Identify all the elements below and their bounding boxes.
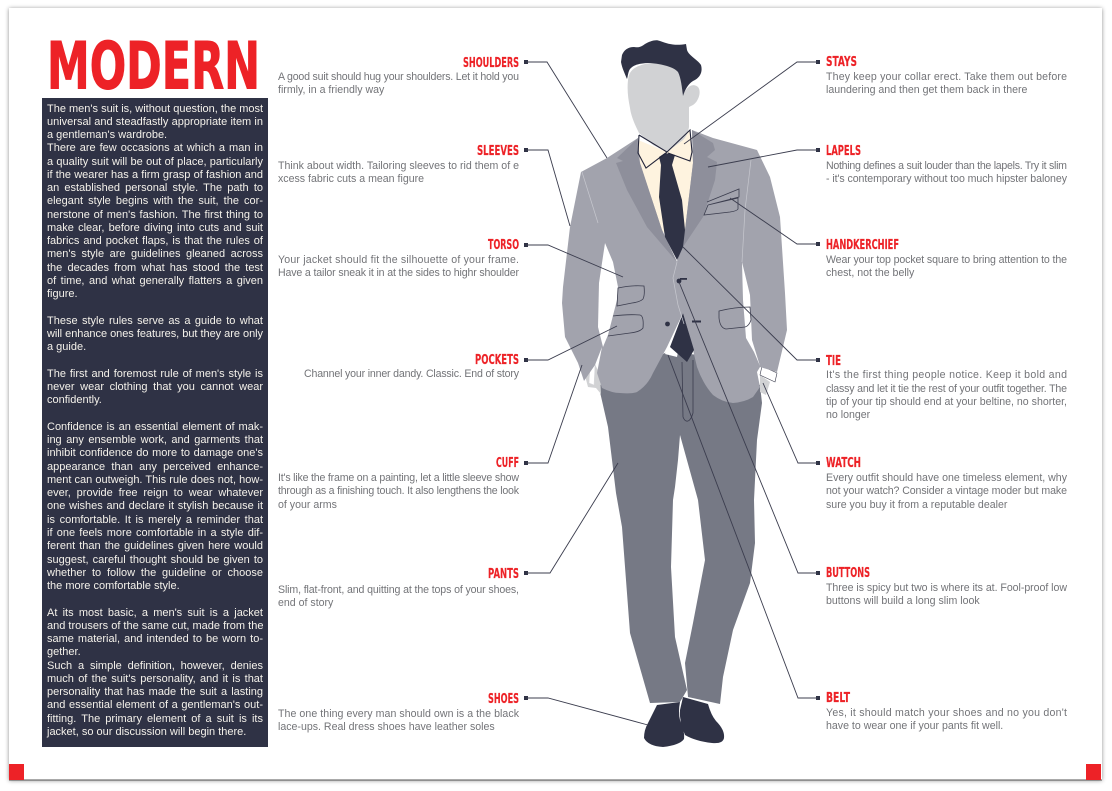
leader: buttons bbox=[679, 282, 820, 575]
necktie bbox=[659, 153, 685, 260]
leader: sleeves bbox=[524, 148, 570, 226]
shirt bbox=[638, 130, 693, 235]
callout: lapels: Nothing defines a suit louder than the lapels. Try it slim bbox=[826, 160, 1067, 172]
panel: introduction text: figure. bbox=[47, 288, 78, 300]
panel: introduction text: Such a simple definition, however, denies bbox=[47, 660, 263, 672]
head and ear bbox=[628, 63, 700, 152]
panel: introduction text: ment can outweigh. This rule does not, how- bbox=[47, 474, 263, 486]
callout: buttons: Three is spicy but two is where its at. Fool-proof low bbox=[826, 582, 1067, 594]
lower tie bbox=[670, 313, 694, 362]
buttons bbox=[665, 278, 701, 326]
pocket square bbox=[704, 189, 739, 215]
panel: introduction text: There are few occasions at which a man in bbox=[47, 142, 263, 154]
hair bbox=[621, 40, 702, 96]
jacket front seam bbox=[582, 160, 751, 324]
panel: introduction text: an established personal style. The path to bbox=[47, 182, 263, 194]
callout: pants: PANTS bbox=[488, 567, 519, 582]
leader: shoes bbox=[524, 696, 648, 725]
panel: introduction text: is comfortable. It is merely a reminder that bbox=[47, 514, 263, 526]
callout: cuff: of your arms bbox=[278, 499, 337, 511]
callout: handkerchief bbox=[826, 238, 1067, 279]
panel: introduction text: These style rules serve as a guide to what bbox=[47, 315, 263, 327]
leader: lapels bbox=[708, 148, 820, 167]
panel: introduction text: At its most basic, a men's suit is a jacket bbox=[47, 607, 263, 619]
leader: handkerchief bbox=[730, 198, 820, 246]
corner marker: bottom left bbox=[9, 764, 24, 780]
cuffs bbox=[589, 365, 595, 385]
callout: torso: TORSO bbox=[488, 238, 519, 253]
callout: lapels: LAPELS bbox=[826, 144, 861, 159]
shoes bbox=[644, 697, 724, 747]
panel: introduction text: whether to follow the guideline or choose bbox=[47, 567, 263, 579]
panel: introduction text: Confidence is an essential element of mak- bbox=[47, 421, 263, 433]
callout: tie: It's the first thing people notice. Keep it bold and bbox=[826, 369, 1067, 381]
callout: watch: not your watch? Consider a vintage moder but make bbox=[826, 485, 1067, 497]
callout: shoulders: SHOULDERS bbox=[463, 56, 519, 71]
panel: introduction text: confidently. bbox=[47, 394, 102, 406]
leader: stays bbox=[684, 60, 820, 144]
right lapel bbox=[677, 130, 717, 262]
callout: shoes bbox=[278, 692, 520, 733]
callout: shoulders bbox=[278, 56, 519, 96]
callout: pockets: POCKETS bbox=[475, 353, 519, 368]
panel: introduction text: the decades from what has stood the test bbox=[47, 262, 263, 274]
panel: introduction text: and trousers of the same cut, made from the bbox=[47, 620, 263, 632]
panel: introduction text: ever, provide free reign to wear whatever bbox=[47, 487, 263, 499]
leader: pockets bbox=[524, 326, 617, 362]
callout: tie: no longer bbox=[826, 409, 871, 421]
belly shirt gap bbox=[665, 349, 678, 357]
callout: watch: Every outfit should have one timeless element, why bbox=[826, 472, 1068, 484]
panel: introduction text: personality that has made the suit a lasting bbox=[47, 686, 263, 698]
panel: introduction text: inhibit confidence do more to damage one's bbox=[47, 447, 263, 459]
callout: tie: tip of your tip should end at your beltine, no shorter, bbox=[826, 396, 1067, 408]
leader: cuff bbox=[524, 365, 582, 465]
callout: watch bbox=[826, 456, 1068, 511]
callout: belt bbox=[826, 691, 1067, 732]
callout: belt: Yes, it should match your shoes and no you don't bbox=[826, 707, 1067, 719]
callout: buttons: buttons will build a long slim look bbox=[826, 595, 980, 607]
callout: torso bbox=[278, 238, 519, 279]
panel: introduction text: gether. bbox=[47, 646, 81, 658]
panel: introduction text: one wishes and declare it stylish because it bbox=[47, 500, 263, 512]
gap between left sleeve and torso bbox=[598, 243, 618, 347]
leader: pants bbox=[524, 463, 618, 575]
callout: handkerchief: chest, not the belly bbox=[826, 267, 915, 279]
callout: stays: They keep your collar erect. Take them out before bbox=[826, 71, 1067, 83]
hands bbox=[584, 364, 770, 395]
callout: cuff: through as a finishing touch. It also lengthens the look bbox=[278, 485, 520, 497]
callout: handkerchief: HANDKERCHIEF bbox=[826, 238, 899, 253]
panel: introduction text: same material, and intended to be worn to- bbox=[47, 633, 263, 645]
panel: introduction text: the more comfortable style. bbox=[47, 580, 180, 592]
panel: introduction text: a quality suit will be out of place, particularly bbox=[47, 156, 263, 168]
panel: introduction text: never wear clothing that you cannot wear bbox=[47, 381, 263, 393]
leader: watch bbox=[763, 383, 820, 465]
callout: torso: Your jacket should fit the silhouette of your frame. bbox=[278, 254, 519, 266]
panel: introduction text: The first and foremost rule of men's style is bbox=[47, 368, 263, 380]
callout: pants: Slim, flat-front, and quitting at the tops of your shoes, bbox=[278, 584, 519, 596]
panel: introduction text: ferent than the guidelines given here would bbox=[47, 540, 263, 552]
callout: tie: classy and let it tie the rest of your outfit together. The bbox=[826, 383, 1067, 395]
leader: shoulders bbox=[524, 60, 607, 158]
panel: introduction text: The men's suit is, without question, the most bbox=[47, 102, 263, 114]
jacket pockets and seams bbox=[608, 286, 751, 421]
panel: introduction text: and essential element of a gentleman's out- bbox=[47, 699, 263, 711]
panel: introduction text: appearance than any perceived enhance- bbox=[47, 461, 263, 473]
leader: tie bbox=[683, 247, 820, 362]
leader: torso bbox=[524, 243, 623, 277]
callout: stays: STAYS bbox=[826, 55, 857, 70]
panel: introduction text: a gentleman's wardrobe. bbox=[47, 129, 167, 141]
callout: lapels: - it's contemporary without too much hipster baloney bbox=[826, 173, 1068, 185]
callout: shoes: lace-ups. Real dress shoes have leather soles bbox=[278, 721, 495, 733]
callout: belt: BELT bbox=[826, 691, 850, 706]
callout: cuff: It's like the frame on a painting, let a little sleeve show bbox=[278, 472, 519, 484]
callout: watch: sure you buy it from a reputable dealer bbox=[826, 499, 1008, 511]
corner marker: bottom right bbox=[1086, 764, 1101, 780]
panel: introduction text: jacket, so our discussion will begin there. bbox=[47, 726, 246, 738]
panel: introduction text: if one feels more comfortable in a style dif- bbox=[47, 527, 263, 539]
callout: shoulders: firmly, in a friendly way bbox=[278, 84, 385, 96]
callout: sleeves: SLEEVES bbox=[477, 144, 519, 159]
jacket bbox=[562, 130, 787, 403]
panel: introduction text: ing any ensemble work, and garments that bbox=[47, 434, 263, 446]
callout: sleeves: xcess fabric cuts a mean figure bbox=[278, 173, 424, 185]
panel: introduction text: universal and steadfastly appropriate item in bbox=[47, 116, 263, 128]
callout: pants bbox=[278, 567, 519, 609]
callout: sleeves bbox=[278, 144, 519, 185]
callout: buttons: BUTTONS bbox=[826, 566, 870, 581]
suited figure bbox=[562, 40, 787, 747]
panel: introduction text: fitting. The primary element of a suit is its bbox=[47, 713, 263, 725]
shirt collar bbox=[638, 130, 692, 168]
callout: shoes: The one thing every man should own is a the black bbox=[278, 708, 520, 720]
gap between right sleeve and torso bbox=[742, 262, 760, 366]
callout: shoes: SHOES bbox=[488, 692, 519, 707]
callout: stays: laundering and then get them back in there bbox=[826, 84, 1028, 96]
pants bbox=[600, 352, 762, 704]
callout: lapels bbox=[826, 144, 1068, 185]
callout: torso: Have a tailor sneak it in at the sides to highr shoulder bbox=[278, 267, 519, 279]
title: MODERN bbox=[47, 30, 260, 104]
leader: belt bbox=[668, 355, 820, 700]
panel: introduction text: elegant style begins with the suit, the cor- bbox=[47, 195, 263, 207]
panel: introduction text: suggest, careful thought should be given to bbox=[47, 554, 263, 566]
callout: sleeves: Think about width. Tailoring sleeves to rid them of e bbox=[278, 160, 519, 172]
panel: introduction text: if the wearer has a firm grasp of fashion and bbox=[47, 169, 263, 181]
callout: cuff: CUFF bbox=[496, 456, 519, 471]
panel: introduction text: fabrics and pocket flaps, is that the rules of bbox=[47, 235, 263, 247]
callout: pants: end of story bbox=[278, 597, 334, 609]
callout: tie bbox=[826, 354, 1067, 421]
callout: buttons bbox=[826, 566, 1067, 607]
panel: introduction text: of time, and what generally flatters a given bbox=[47, 275, 263, 287]
callout: watch: WATCH bbox=[826, 456, 861, 471]
callout: shoulders: A good suit should hug your shoulders. Let it hold you bbox=[278, 71, 519, 83]
panel: introduction text: make clear, before diving into cuts and suit bbox=[47, 222, 263, 234]
callout: belt: have to wear one if your pants fit well. bbox=[826, 720, 1003, 732]
left lapel bbox=[616, 138, 677, 262]
panel: introduction text: nerstone of men's fashion. The first thing to bbox=[47, 209, 263, 221]
panel: introduction text: much of the suit's personality, and it is that bbox=[47, 673, 263, 685]
panel: introduction text: a guide. bbox=[47, 341, 86, 353]
panel: introduction text bbox=[42, 98, 268, 747]
panel: introduction text: will enhance ones features, but they are only bbox=[47, 328, 263, 340]
callout: cuff bbox=[278, 456, 520, 511]
callout: pockets bbox=[304, 353, 520, 380]
callout: stays bbox=[826, 55, 1067, 96]
callout: handkerchief: Wear your top pocket square to bring attention to the bbox=[826, 254, 1067, 266]
panel: introduction text: men's style are guidelines gleaned across bbox=[47, 248, 263, 260]
callout: pockets: Channel your inner dandy. Classic. End of story bbox=[304, 368, 520, 380]
callout: tie: TIE bbox=[826, 354, 841, 369]
